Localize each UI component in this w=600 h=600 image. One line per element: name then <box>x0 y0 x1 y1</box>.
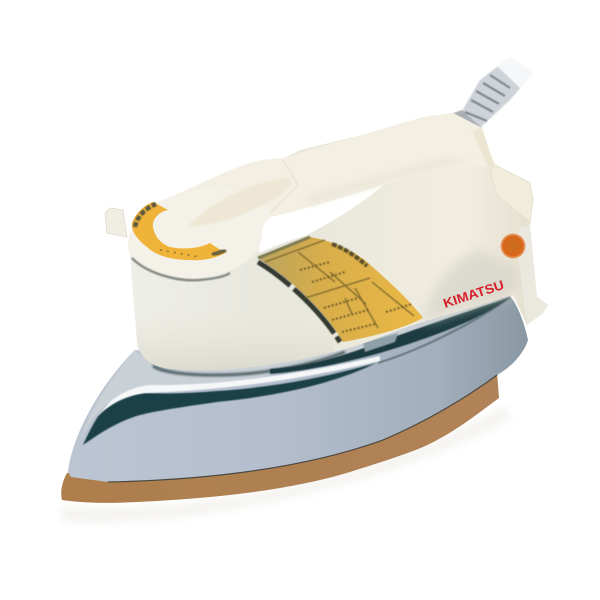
brand logo: KIMATSU <box>441 277 506 311</box>
dark reflection <box>83 361 380 445</box>
body base shading <box>134 300 340 370</box>
power cord <box>434 57 533 133</box>
chrome block under label <box>363 333 398 352</box>
dark reflection tail <box>378 298 510 363</box>
handle <box>170 113 495 240</box>
rear lower shading <box>423 250 520 322</box>
upper bright lip <box>80 298 512 440</box>
dark band under body <box>270 297 511 374</box>
rear foot <box>518 225 548 325</box>
gold settings label <box>258 237 423 342</box>
chrome shell <box>68 296 528 482</box>
ground shadow <box>60 405 510 523</box>
dial markings <box>135 204 156 227</box>
rear ridge <box>472 128 495 167</box>
handle collar seam <box>270 160 298 213</box>
rear bracket <box>490 165 533 222</box>
release tab <box>105 208 127 237</box>
body <box>130 113 548 370</box>
indicator lamp <box>500 234 526 258</box>
soleplate edge line <box>108 375 497 482</box>
handle opening <box>259 185 383 253</box>
white reflection <box>98 356 380 416</box>
cap groove <box>132 258 230 280</box>
chrome base shadow <box>153 352 345 375</box>
handle underside shading <box>305 158 470 205</box>
thumb rest <box>187 178 291 227</box>
soleplate <box>61 372 499 503</box>
dial scale <box>132 202 225 260</box>
dial cap <box>128 160 298 280</box>
